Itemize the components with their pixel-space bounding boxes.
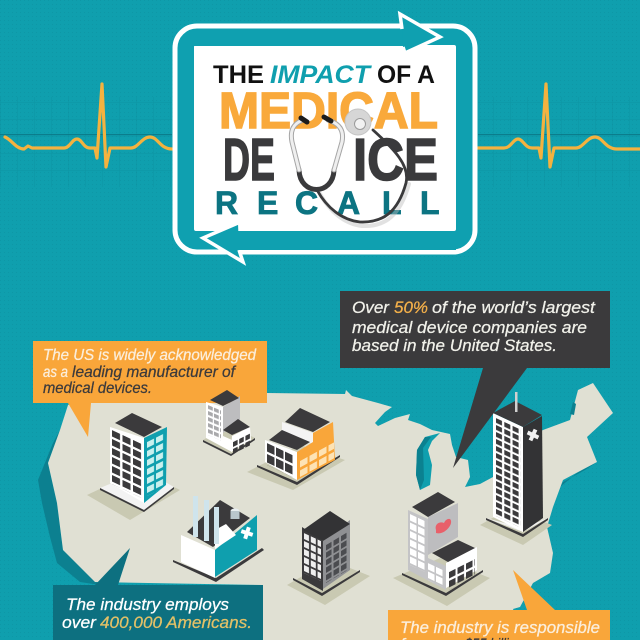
- callout: industry revenue: The industry is responsible: [400, 618, 600, 637]
- white cross on factory: [239, 525, 255, 541]
- callout: industry employs: The industry employs: [66, 595, 229, 614]
- callout: leading manufacturer: leading manufacturer of: [72, 364, 236, 381]
- callout: leading manufacturer: [33, 341, 267, 437]
- callout: over 50 percent: of the world’s largest: [432, 298, 596, 317]
- title text: [213, 61, 440, 221]
- title text: L: [420, 185, 440, 221]
- building: teal tower: [87, 413, 180, 520]
- building: hospital with heart: [393, 492, 490, 606]
- callout: over 50 percent: [340, 291, 610, 468]
- left ECG heartbeat line: [0, 84, 172, 187]
- callout: leading manufacturer: The US is widely acknowledged: [43, 347, 257, 364]
- title text: E: [257, 185, 278, 221]
- title text: L: [382, 185, 402, 221]
- right ECG heartbeat line: [478, 84, 640, 187]
- building: tall black tower with antenna: [480, 392, 552, 545]
- title text: A: [337, 185, 360, 221]
- callout: industry employs: over: [62, 613, 97, 632]
- title text: C: [295, 185, 318, 221]
- title text: THE: [213, 61, 264, 89]
- building: dark grey office: [287, 511, 370, 605]
- title text: OF A: [377, 61, 435, 89]
- title text: MEDICAL: [219, 82, 438, 139]
- title text: ICE: [353, 127, 438, 193]
- white cross on tower: [525, 427, 541, 443]
- title text: R: [215, 185, 238, 221]
- badge frame with circular arrows: [175, 14, 475, 262]
- callout: over 50 percent: 50%: [394, 298, 428, 317]
- icon: heart: [436, 519, 451, 533]
- map of the United States: [38, 383, 613, 640]
- building: factory with smokestacks: [173, 496, 264, 582]
- callout: over 50 percent: Over: [352, 298, 390, 317]
- title text: DE: [223, 127, 275, 193]
- Maine lake: [570, 402, 576, 415]
- lake Michigan: [416, 433, 440, 490]
- callout: industry employs: [53, 548, 263, 640]
- callout: over 50 percent: based in the United States.: [352, 336, 557, 355]
- callout: leading manufacturer: as a: [43, 364, 68, 381]
- callout: leading manufacturer: medical devices.: [43, 380, 152, 397]
- callout: over 50 percent: medical device companies are: [352, 318, 587, 337]
- callout: industry employs: 400,000 Americans.: [100, 613, 252, 632]
- title badge: [175, 14, 475, 262]
- icon: stethoscope: [291, 109, 409, 226]
- map coast shadow: [38, 430, 597, 585]
- callout: industry revenue: [388, 570, 610, 640]
- building: orange office: [247, 408, 345, 490]
- building: small grey office: [203, 390, 255, 456]
- map land: [48, 383, 613, 640]
- title text: IMPACT: [270, 61, 373, 89]
